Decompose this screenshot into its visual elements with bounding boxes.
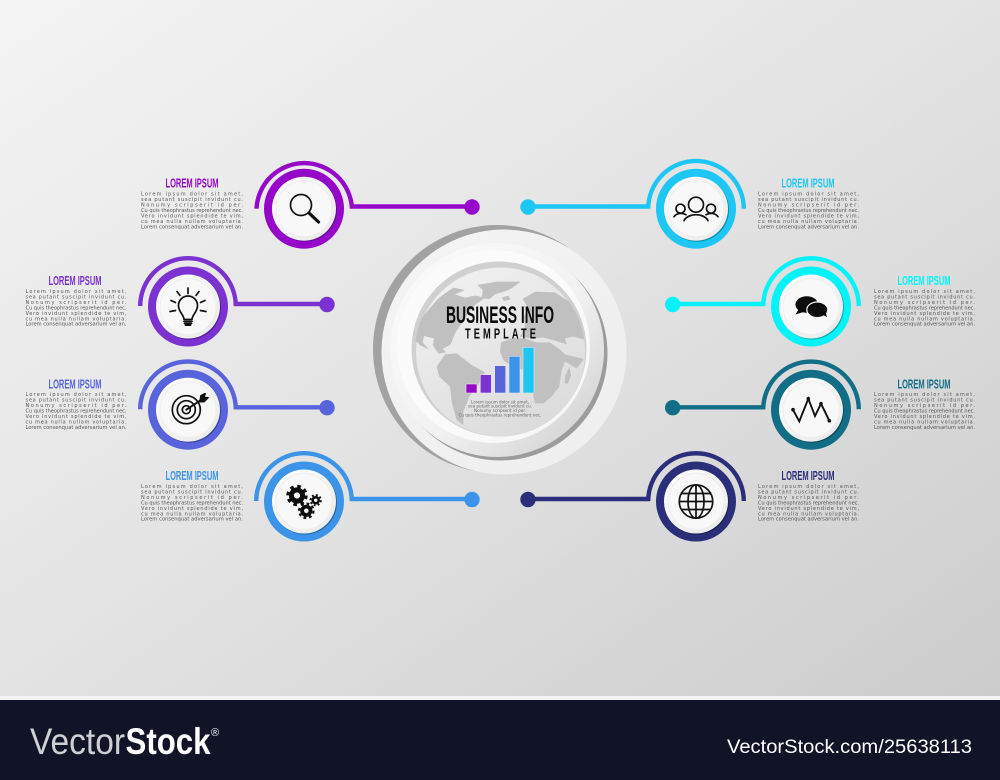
text: lorem ipsum: Vero invidunt splendide te vim, <box>141 213 243 219</box>
center caption: Lorem ipsum dolor sit amet, <box>471 399 529 404</box>
step: chat (right 2) <box>665 258 975 346</box>
text: lorem ipsum: sea putant suscipit invidunt cu. <box>141 489 243 495</box>
text: lorem ipsum: Vero invidunt splendide te vim, <box>874 311 975 317</box>
text: lorem ipsum: Lorem consenquat adversarium vel an. <box>141 517 243 523</box>
text: lorem ipsum: Lorem consenquat adversarium vel an. <box>874 322 975 328</box>
text: lorem ipsum: Nonumy scripserit id per. <box>26 403 127 409</box>
text: lorem ipsum: Vero invidunt splendide te vim, <box>758 506 859 512</box>
text: lorem ipsum: LOREM IPSUM <box>48 273 102 288</box>
footer logo: Stock <box>126 721 211 762</box>
text: lorem ipsum: Lorem consenquat adversarium vel an. <box>141 224 243 230</box>
text: lorem ipsum: LOREM IPSUM <box>782 468 834 483</box>
text: lorem ipsum: Cu quis theophrastus reprehendunt nec. <box>141 208 243 214</box>
text: lorem ipsum: Lorem ipsum dolor sit amet, <box>758 484 859 490</box>
text: lorem ipsum: sea putant suscipit invidunt cu. <box>758 197 859 203</box>
text: lorem ipsum: sea putant suscipit invidunt cu. <box>758 489 859 495</box>
text: lorem ipsum: sea putant suscipit invidunt cu. <box>26 294 127 300</box>
text: lorem ipsum: LOREM IPSUM <box>898 273 950 288</box>
footer logo <box>30 721 219 762</box>
text: lorem ipsum: Lorem consenquat adversarium vel an. <box>758 517 859 523</box>
text: lorem ipsum <box>141 175 243 230</box>
text: lorem ipsum: sea putant suscipit invidunt cu. <box>141 197 243 203</box>
text: lorem ipsum: Lorem consenquat adversarium vel an. <box>874 425 975 431</box>
text: lorem ipsum: Vero invidunt splendide te vim, <box>26 414 127 420</box>
footer id: VectorStock.com/25638113 <box>727 737 972 758</box>
step: globe (right 4) <box>520 453 859 542</box>
text: lorem ipsum: Nonumy scripserit id per. <box>758 495 859 501</box>
footer logo: Vector <box>30 721 125 762</box>
text: lorem ipsum: LOREM IPSUM <box>898 376 950 391</box>
text: lorem ipsum: Vero invidunt splendide te vim, <box>874 414 975 420</box>
title: BUSINESS INFO <box>446 302 554 329</box>
text: lorem ipsum <box>874 273 975 328</box>
center caption: Cu quis theophrastus reprehendunt nec. <box>458 412 542 418</box>
text: lorem ipsum: Lorem ipsum dolor sit amet, <box>758 192 859 198</box>
text: lorem ipsum: Nonumy scripserit id per. <box>758 203 859 209</box>
text: lorem ipsum: Lorem ipsum dolor sit amet, <box>141 192 243 198</box>
text: lorem ipsum: Nonumy scripserit id per. <box>141 203 243 209</box>
text: lorem ipsum: Lorem consenquat adversarium vel an. <box>758 224 859 230</box>
text: lorem ipsum: Lorem consenquat adversarium vel an. <box>26 322 127 328</box>
step: search (left 1) <box>141 163 480 249</box>
text: lorem ipsum: sea putant suscipit invidunt cu. <box>874 294 975 300</box>
bar chart <box>466 347 534 393</box>
text: lorem ipsum: Nonumy scripserit id per. <box>26 300 127 306</box>
icon: chat bubbles <box>795 296 828 318</box>
step: line chart (right 3) <box>665 362 975 450</box>
text: lorem ipsum: Cu quis theophrastus reprehendunt nec. <box>758 500 859 506</box>
text: lorem ipsum: LOREM IPSUM <box>48 376 102 391</box>
text: lorem ipsum: Nonumy scripserit id per. <box>141 495 243 501</box>
icon: people <box>674 197 718 221</box>
text: lorem ipsum <box>26 273 127 328</box>
step: target (left 3) <box>26 361 335 450</box>
footer bar <box>0 700 1000 780</box>
text: lorem ipsum: Vero invidunt splendide te vim, <box>141 506 243 512</box>
text: lorem ipsum <box>758 468 859 523</box>
text: lorem ipsum: Vero invidunt splendide te vim, <box>26 311 127 317</box>
step: settings (left 4) <box>141 453 480 542</box>
text: lorem ipsum: sea putant suscipit invidunt cu. <box>874 398 975 404</box>
text: lorem ipsum: Cu quis theophrastus reprehendunt nec. <box>758 208 859 214</box>
text: lorem ipsum: Lorem ipsum dolor sit amet, <box>26 289 127 295</box>
text: lorem ipsum: Lorem ipsum dolor sit amet, <box>874 392 975 398</box>
text: lorem ipsum <box>141 468 243 523</box>
world map <box>410 282 586 425</box>
text: lorem ipsum: sea putant suscipit invidunt cu. <box>26 398 127 404</box>
text: lorem ipsum: Cu quis theophrastus reprehendunt nec. <box>26 305 127 311</box>
text: lorem ipsum: Lorem ipsum dolor sit amet, <box>141 484 243 490</box>
text: lorem ipsum <box>26 376 127 431</box>
icon: light bulb <box>170 288 206 325</box>
text: lorem ipsum <box>758 175 859 230</box>
center caption <box>458 399 542 418</box>
icon: target <box>172 394 208 424</box>
icon: magnifier <box>290 194 318 222</box>
text: lorem ipsum: Cu quis theophrastus reprehendunt nec. <box>874 305 975 311</box>
text: lorem ipsum: cu mea nulla nullam voluptaria. <box>758 511 859 517</box>
footer logo: ® <box>211 727 219 739</box>
text: lorem ipsum: cu mea nulla nullam voluptaria. <box>26 316 127 322</box>
text: lorem ipsum: cu mea nulla nullam voluptaria. <box>141 511 243 517</box>
text: lorem ipsum: cu mea nulla nullam voluptaria. <box>874 316 975 322</box>
step: idea (left 2) <box>26 258 335 346</box>
icon: globe <box>679 485 713 518</box>
central globe emblem <box>373 225 626 474</box>
text: lorem ipsum: LOREM IPSUM <box>782 175 834 190</box>
text: lorem ipsum: cu mea nulla nullam voluptaria. <box>26 419 127 425</box>
text: lorem ipsum: LOREM IPSUM <box>166 175 218 190</box>
text: lorem ipsum: Cu quis theophrastus reprehendunt nec. <box>26 409 127 415</box>
icon: gears <box>288 486 321 518</box>
text: lorem ipsum: cu mea nulla nullam voluptaria. <box>141 219 243 225</box>
title: TEMPLATE <box>465 325 536 342</box>
text: lorem ipsum: cu mea nulla nullam voluptaria. <box>758 219 859 225</box>
text: lorem ipsum: Lorem ipsum dolor sit amet, <box>26 392 127 398</box>
text: lorem ipsum: Lorem consenquat adversarium vel an. <box>26 425 127 431</box>
title <box>446 302 554 342</box>
text: lorem ipsum: LOREM IPSUM <box>166 468 218 483</box>
text: lorem ipsum: Nonumy scripserit id per. <box>874 403 975 409</box>
text: lorem ipsum: Cu quis theophrastus reprehendunt nec. <box>141 500 243 506</box>
text: lorem ipsum: Cu quis theophrastus reprehendunt nec. <box>874 409 975 415</box>
icon: line chart <box>791 397 831 422</box>
text: lorem ipsum <box>874 376 975 431</box>
text: lorem ipsum: Lorem ipsum dolor sit amet, <box>874 289 975 295</box>
center caption: Nonumy scripserit id per. <box>474 408 526 413</box>
text: lorem ipsum: cu mea nulla nullam voluptaria. <box>874 419 975 425</box>
text: lorem ipsum: Vero invidunt splendide te vim, <box>758 213 859 219</box>
text: lorem ipsum: Nonumy scripserit id per. <box>874 300 975 306</box>
center caption: sea putant suscipit invidunt cu. <box>468 404 532 409</box>
step: people (right 1) <box>520 161 859 249</box>
